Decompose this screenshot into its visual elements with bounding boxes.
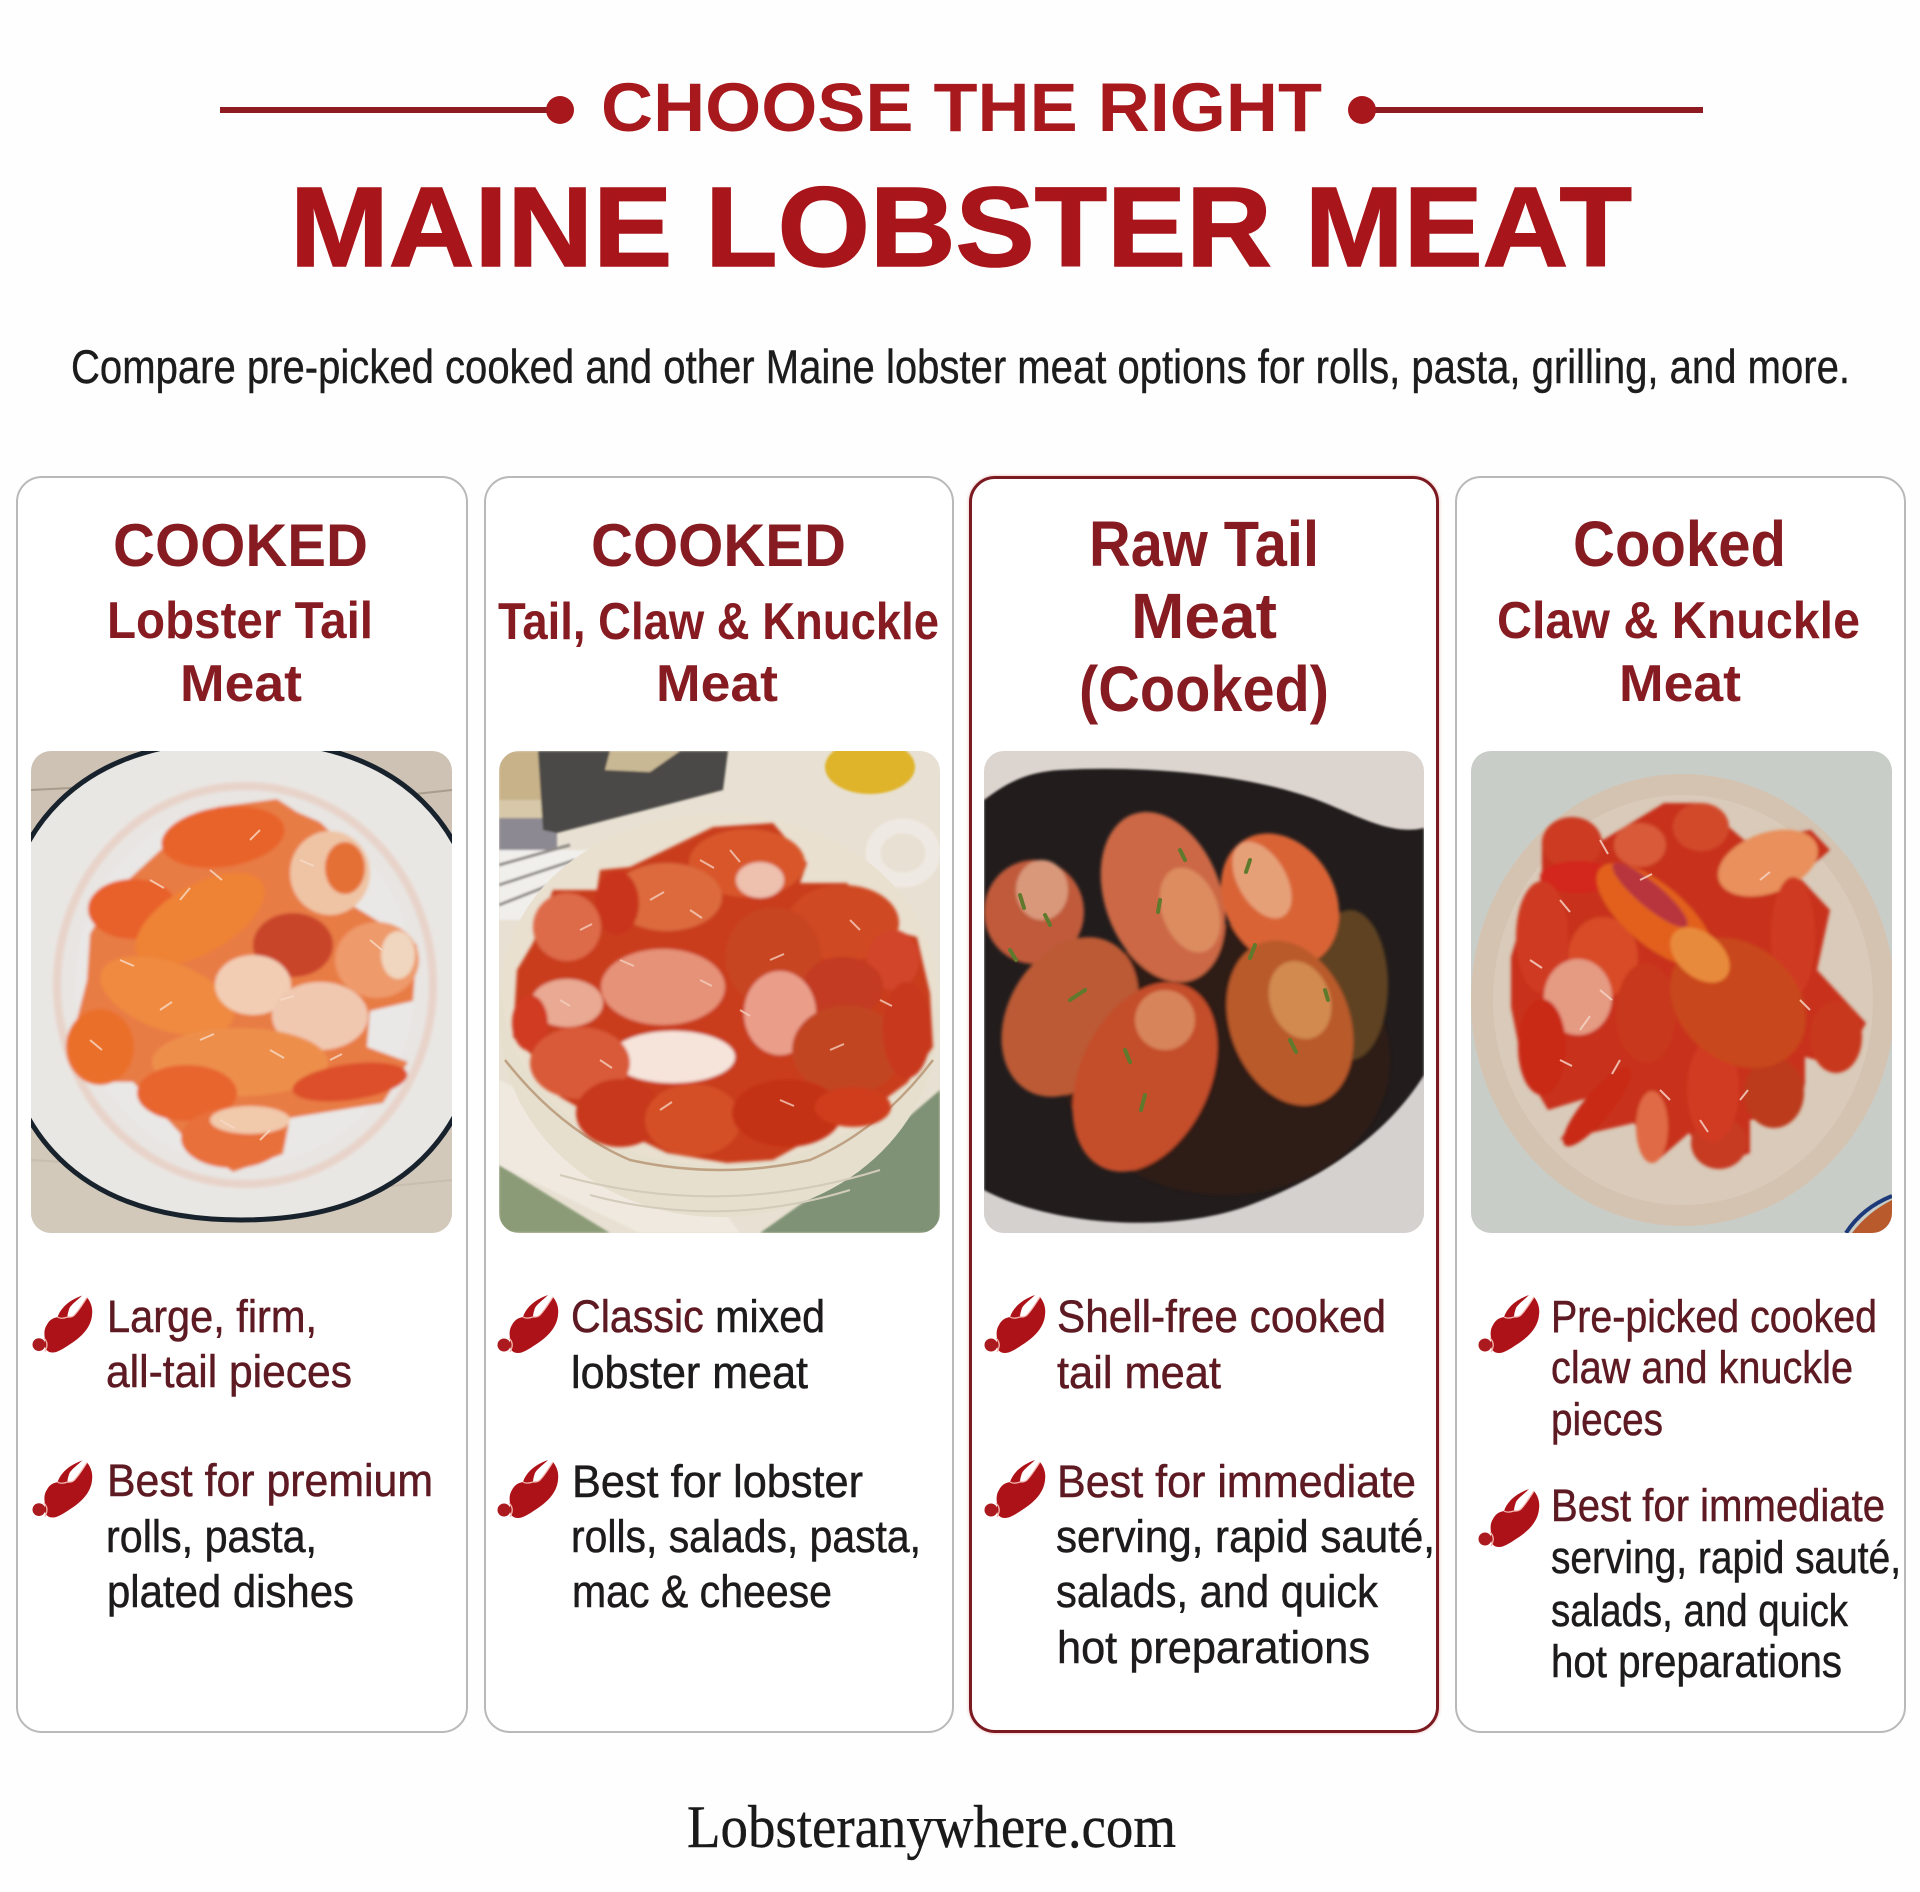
heading: cooked lobster tail meat: Meat — [180, 655, 302, 713]
heading: cooked lobster tail meat: Lobster Tail — [107, 592, 373, 650]
bullet: best for: rolls, pasta, — [106, 1511, 317, 1562]
bullet: pre-picked: claw and knuckle — [1551, 1342, 1853, 1393]
heading: raw tail meat cooked: Raw Tail — [1089, 508, 1319, 580]
card 4 text — [1478, 508, 1901, 1687]
title: line one: CHOOSE THE RIGHT — [601, 69, 1322, 146]
bullet: best for: Best for premium — [107, 1455, 433, 1506]
heading: cooked claw knuckle meat: Claw & Knuckle — [1497, 592, 1860, 650]
bullet: best for — [498, 1456, 921, 1617]
heading: cooked claw knuckle meat — [1497, 508, 1860, 713]
heading: raw tail meat cooked: Meat — [1131, 580, 1277, 652]
photo: cast iron skillet — [984, 751, 1424, 1233]
heading: cooked tail claw knuckle meat: COOKED — [591, 512, 846, 579]
photo: plate of lobster tail meat — [31, 751, 452, 1233]
bullet: large firm pieces: Large, firm, — [107, 1291, 317, 1342]
bullet: best for — [33, 1455, 433, 1617]
bullet: large firm pieces: all-tail pieces — [106, 1346, 352, 1397]
bullet: shell-free: Shell-free cooked — [1057, 1291, 1386, 1342]
bullet: best for: hot preparations — [1057, 1622, 1370, 1673]
bullet: best for: mac & cheese — [572, 1566, 832, 1617]
bullet: best for — [1478, 1480, 1901, 1687]
heading: cooked tail claw knuckle meat: Meat — [656, 655, 778, 713]
bullet: best for: plated dishes — [107, 1566, 354, 1617]
bullet: shell-free: tail meat — [1057, 1347, 1221, 1398]
bullet: pre-picked — [1478, 1291, 1877, 1445]
bullet: classic mixed: lobster meat — [571, 1347, 808, 1398]
panel: cooked claw and knuckle meat — [1455, 476, 1906, 1733]
panel: raw tail meat cooked (highlighted) — [969, 476, 1439, 1733]
heading: cooked tail claw knuckle meat — [498, 512, 939, 713]
bullet: best for: Best for lobster — [572, 1456, 863, 1507]
bullet: classic mixed — [498, 1291, 825, 1398]
heading: cooked claw knuckle meat: Meat — [1619, 655, 1741, 713]
bullet: shell-free — [984, 1291, 1386, 1398]
bullet: best for: rolls, salads, pasta, — [571, 1511, 921, 1562]
heading: raw tail meat cooked — [1079, 508, 1329, 725]
bullet: classic mixed: Classic mixed — [571, 1291, 825, 1342]
bullet: best for: salads, and quick — [1056, 1566, 1378, 1617]
header: title block — [71, 69, 1850, 394]
panel: cooked tail claw and knuckle meat — [484, 476, 954, 1733]
photo: plate of claw and knuckle meat — [1471, 751, 1892, 1233]
title: main heading: MAINE LOBSTER MEAT — [290, 164, 1632, 290]
title: right line with dot — [1348, 96, 1703, 124]
heading: cooked lobster tail meat — [107, 512, 373, 713]
bullet: pre-picked: pieces — [1551, 1394, 1663, 1445]
heading: cooked claw knuckle meat: Cooked — [1573, 508, 1786, 580]
card 1 text — [32, 512, 433, 1617]
heading: raw tail meat cooked: (Cooked) — [1079, 653, 1329, 725]
card 3 text — [984, 508, 1435, 1673]
title: left line with dot — [220, 96, 574, 124]
bullet: pre-picked: Pre-picked cooked — [1551, 1291, 1877, 1342]
bullet: large firm pieces — [33, 1291, 352, 1397]
heading: cooked lobster tail meat: COOKED — [113, 512, 368, 579]
bullet: best for — [984, 1456, 1435, 1673]
photo: bowl of mixed lobster meat — [499, 751, 940, 1233]
card 2 text — [498, 512, 939, 1617]
bullet: best for: hot preparations — [1551, 1636, 1842, 1687]
bullet: best for: salads, and quick — [1551, 1585, 1848, 1636]
panel: cooked lobster tail meat — [16, 476, 468, 1733]
bullet: best for: Best for immediate — [1057, 1456, 1416, 1507]
bullet: best for: Best for immediate — [1551, 1480, 1885, 1531]
